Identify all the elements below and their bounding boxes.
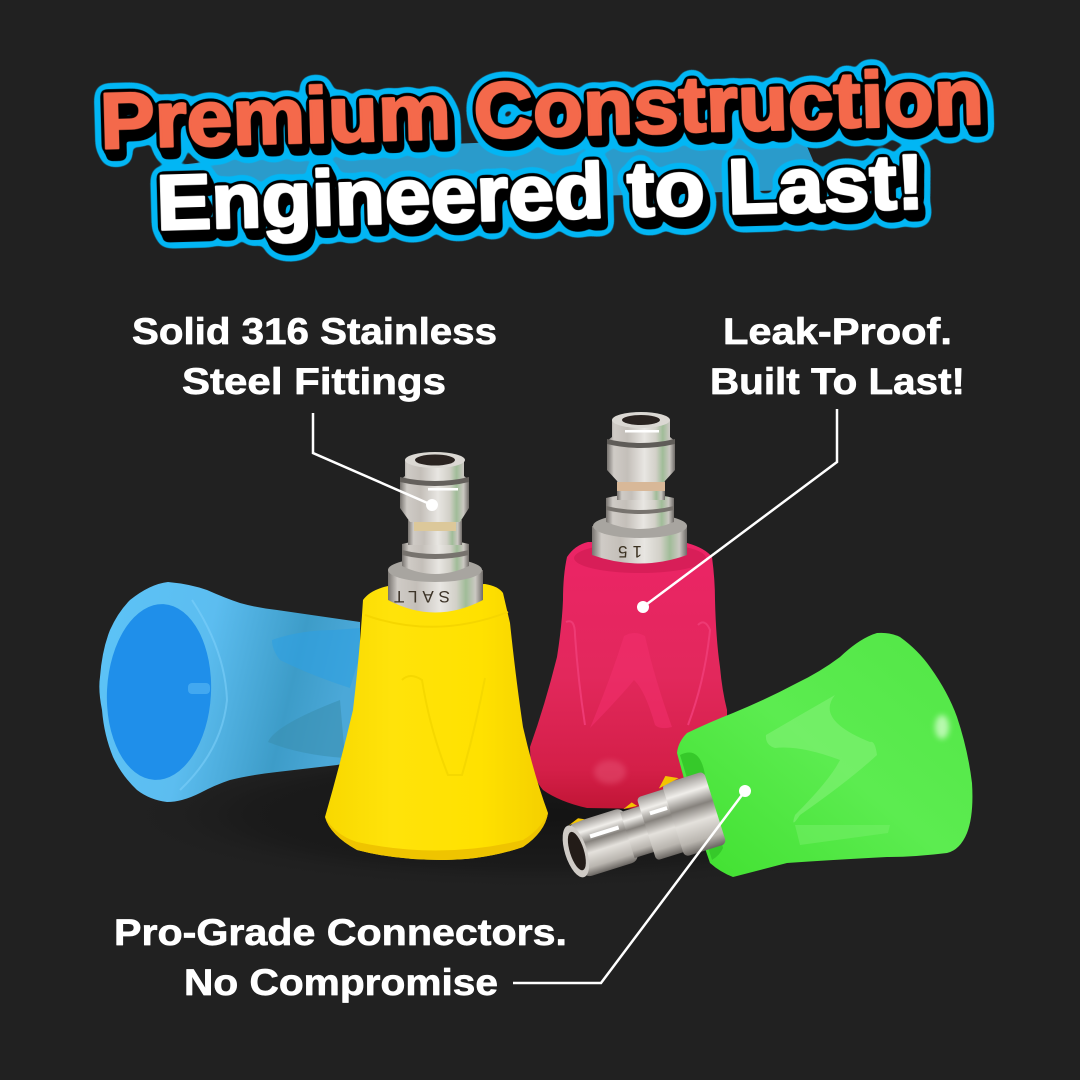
icon: yellow nozzle bbox=[325, 584, 548, 860]
label: stainless fittings: Steel Fittings bbox=[182, 361, 446, 402]
title bbox=[99, 52, 987, 248]
label: pro-grade connectors bbox=[114, 912, 567, 1003]
icon: green nozzle bbox=[677, 633, 972, 877]
label: stainless fittings: Solid 316 Stainless bbox=[132, 311, 497, 352]
icon: yellow nozzle stainless connector bbox=[388, 452, 483, 612]
callout line: leak-proof bbox=[637, 409, 837, 613]
label: stainless fittings bbox=[132, 311, 497, 402]
label: leak-proof bbox=[710, 311, 965, 402]
title backing patch bbox=[180, 130, 815, 205]
title line 1: Premium Construction bbox=[99, 52, 985, 165]
label: pro-grade connectors: Pro-Grade Connectors. bbox=[114, 912, 567, 953]
brand marking: SALT bbox=[394, 587, 450, 606]
label: leak-proof: Leak-Proof. bbox=[723, 311, 952, 352]
product shadow bbox=[120, 740, 960, 890]
callout line: stainless fittings bbox=[313, 413, 438, 511]
callout line: pro-grade connectors bbox=[513, 785, 751, 983]
icon: green nozzle stainless connector bbox=[552, 765, 727, 891]
label: pro-grade connectors: No Compromise bbox=[184, 962, 498, 1003]
icon: pink nozzle bbox=[530, 542, 727, 810]
title line 2: Engineered to Last! bbox=[155, 137, 925, 247]
size marking: 15 bbox=[618, 542, 642, 561]
label: leak-proof: Built To Last! bbox=[710, 361, 965, 402]
icon: blue nozzle bbox=[99, 582, 360, 802]
icon: pink nozzle stainless connector bbox=[592, 412, 687, 564]
